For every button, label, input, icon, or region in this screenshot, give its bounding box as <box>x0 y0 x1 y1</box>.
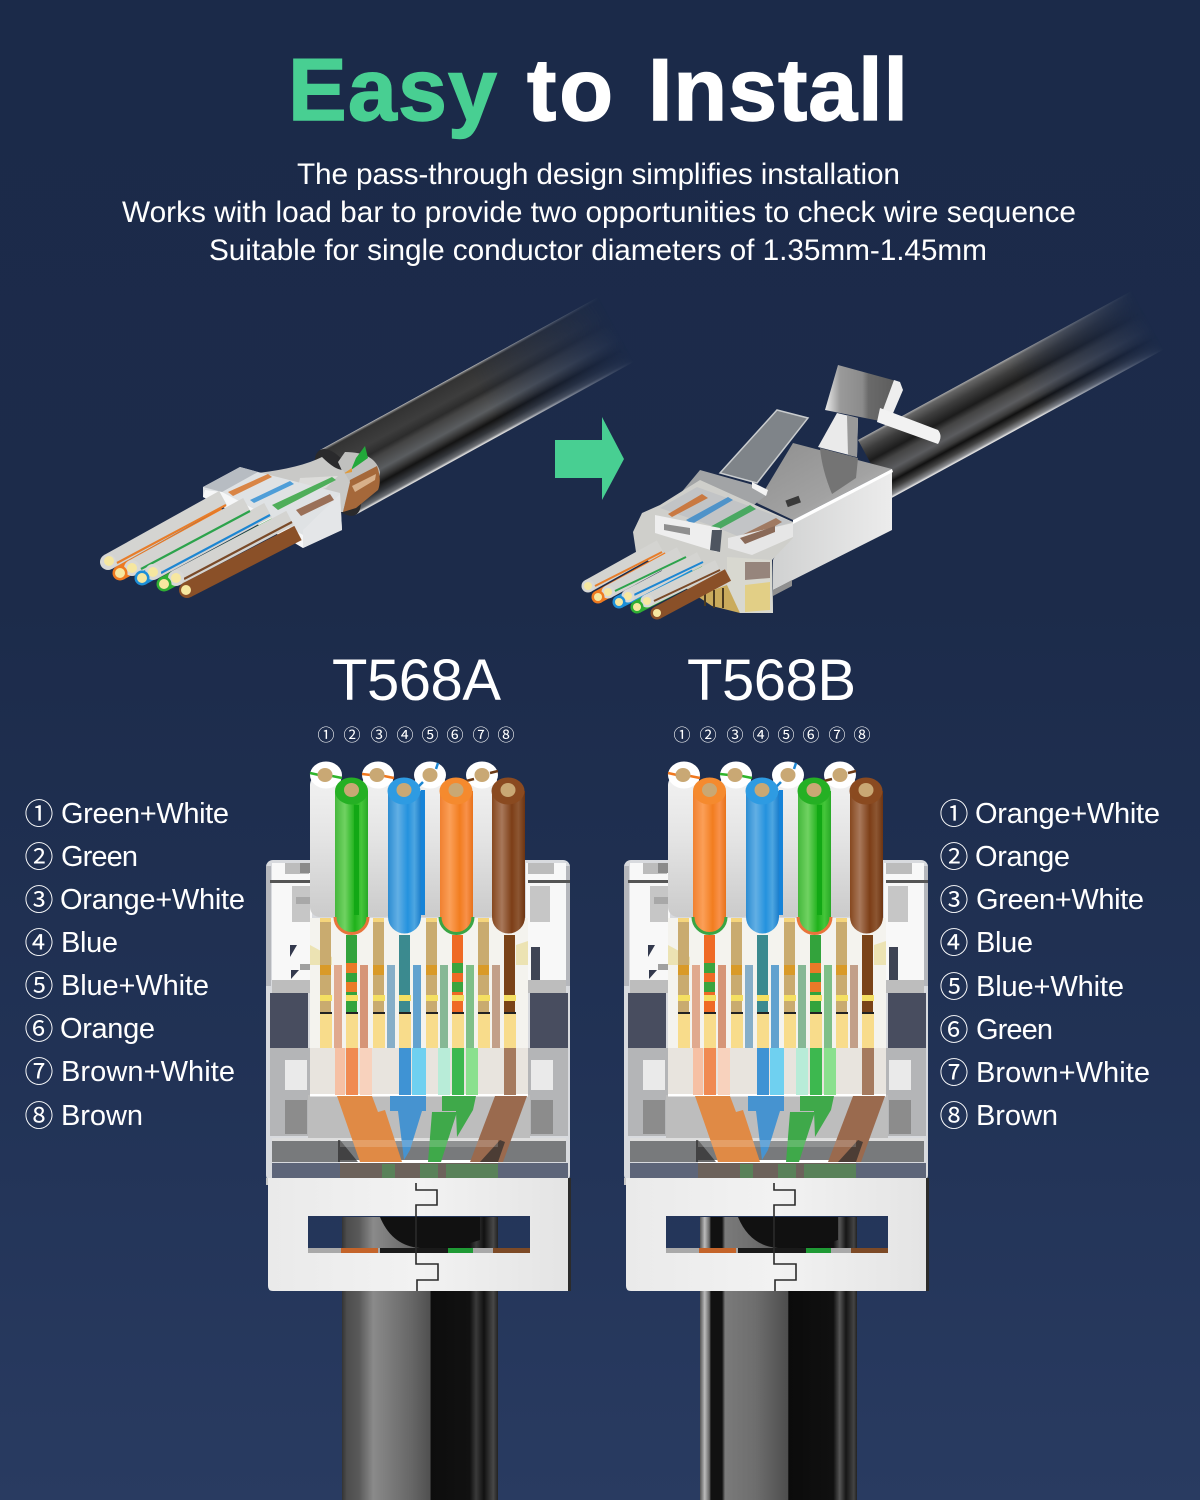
T568A legend: ⑧ <box>24 1093 54 1135</box>
white conductors <box>310 762 498 917</box>
subtitle text block: The pass-through design simplifies installation <box>297 158 900 191</box>
T568A legend: ① <box>24 791 54 833</box>
title: Install <box>648 40 908 139</box>
cable jacket <box>858 287 1171 499</box>
T568B legend: Green+White <box>976 884 1144 916</box>
T568A legend: Green+White <box>61 798 229 830</box>
T568A legend: ⑤ <box>24 963 54 1005</box>
T568A legend: Blue <box>61 927 118 959</box>
T568A legend: ② <box>24 834 54 876</box>
pin numbers T568B: ② <box>700 721 716 746</box>
cable <box>700 1217 857 1500</box>
cable core seen through window <box>738 1217 838 1248</box>
pin numbers T568B: ⑧ <box>854 721 870 746</box>
T568A legend: ⑦ <box>24 1049 54 1091</box>
title: Easy <box>288 40 497 139</box>
pin numbers T568A: ① <box>318 721 334 746</box>
clear plug <box>203 467 342 548</box>
subtitle text block: Suitable for single conductor diameters of 1.35mm-1.45mm <box>209 234 987 267</box>
T568B legend: ⑦ <box>939 1050 969 1092</box>
T568B legend: Brown <box>976 1100 1058 1132</box>
T568B legend: ④ <box>939 920 969 962</box>
strain relief tab <box>818 365 940 457</box>
pin numbers T568A: ② <box>344 721 360 746</box>
coloured conductors <box>335 778 525 934</box>
pin numbers T568A: ⑥ <box>446 721 464 746</box>
T568B legend: Orange <box>975 841 1070 873</box>
title <box>288 40 908 139</box>
arrow <box>555 417 624 500</box>
pin numbers T568B: ⑤ <box>778 721 794 746</box>
connector: T568B <box>624 762 929 1500</box>
cable jacket <box>314 302 628 516</box>
subtitle text block: Works with load bar to provide two opportunities to check wire sequence <box>122 196 1076 229</box>
cable core seen through window <box>380 1217 480 1248</box>
T568B legend: Brown+White <box>976 1057 1150 1089</box>
load bar <box>268 1178 571 1291</box>
white conductors <box>668 762 856 917</box>
gold contacts <box>320 918 516 1095</box>
T568A legend: ④ <box>24 920 54 962</box>
pin numbers T568B: ① <box>674 721 690 746</box>
clear plug body <box>633 480 793 613</box>
T568A legend: ③ <box>24 877 54 919</box>
pin numbers T568A: ⑦ <box>472 721 490 746</box>
illustration: finished plug with shield <box>582 287 1171 620</box>
heading: T568A: T568A <box>332 648 501 713</box>
pin numbers T568B: ③ <box>726 721 744 746</box>
pin numbers T568B <box>674 721 870 746</box>
housing <box>266 860 570 1185</box>
T568B legend: ⑤ <box>939 964 969 1006</box>
wires of the left plug <box>108 498 298 590</box>
T568B legend: Orange+White <box>975 798 1160 830</box>
pin numbers T568A <box>318 721 514 746</box>
T568B legend: ⑧ <box>939 1093 969 1135</box>
inner pairs in cable mouth <box>338 452 380 488</box>
cable <box>342 1217 498 1500</box>
pin numbers T568A: ⑧ <box>498 721 514 746</box>
subtitle text block <box>122 158 1076 267</box>
T568A legend: Orange+White <box>60 884 245 916</box>
T568B legend: ③ <box>939 877 969 919</box>
illustration: stripped cable threaded through plug <box>100 293 640 598</box>
pin numbers T568A: ③ <box>370 721 388 746</box>
T568B legend: Green <box>976 1014 1053 1046</box>
pin numbers T568A: ④ <box>396 721 414 746</box>
T568B legend: Blue <box>976 927 1033 959</box>
pin numbers T568B: ⑦ <box>828 721 846 746</box>
pin numbers T568B: ⑥ <box>802 721 820 746</box>
gold contacts <box>678 918 874 1095</box>
pin numbers T568B: ④ <box>752 721 770 746</box>
T568A legend: Blue+White <box>61 970 209 1002</box>
T568B legend: ① <box>939 791 969 833</box>
T568A legend: Brown+White <box>61 1056 235 1088</box>
T568A legend: ⑥ <box>24 1006 54 1048</box>
load bar <box>626 1178 929 1291</box>
T568B legend: Blue+White <box>976 971 1124 1003</box>
shield <box>757 443 892 520</box>
coloured conductors <box>693 778 883 934</box>
T568B legend <box>939 791 1160 1135</box>
T568B legend: ② <box>939 834 969 876</box>
connector: T568A <box>266 762 571 1500</box>
title: to <box>527 40 613 139</box>
T568A legend: Orange <box>60 1013 155 1045</box>
latch <box>720 410 808 483</box>
heading: T568B: T568B <box>687 648 856 713</box>
T568A legend: Brown <box>61 1100 143 1132</box>
T568A legend <box>24 791 245 1135</box>
housing <box>624 860 928 1185</box>
pin numbers T568A: ⑤ <box>422 721 438 746</box>
wires of the right plug <box>588 546 728 613</box>
T568B legend: ⑥ <box>939 1007 969 1049</box>
T568A legend: Green <box>61 841 138 873</box>
